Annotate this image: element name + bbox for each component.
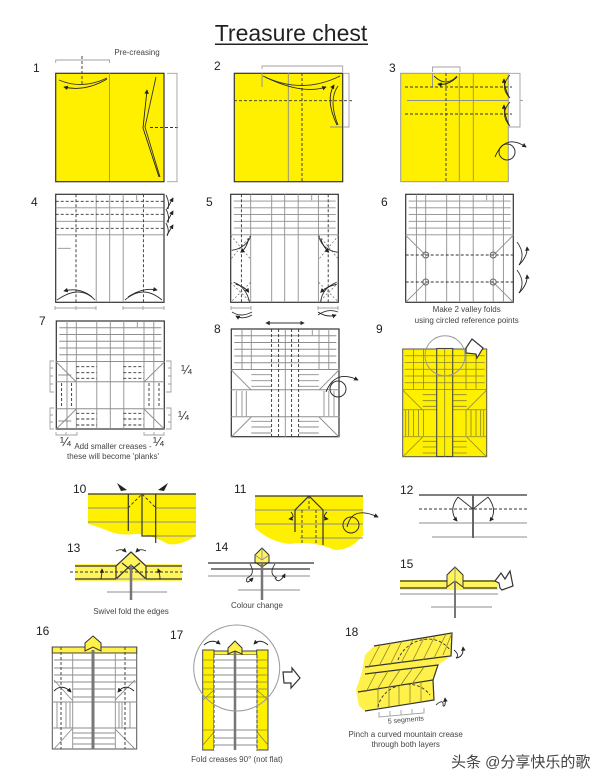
icon: turn over — [495, 142, 526, 160]
step 11: 11 — [234, 482, 247, 496]
step 12 — [400, 483, 527, 538]
step 17 — [170, 625, 300, 764]
step 4: 4 — [31, 195, 38, 209]
step 18: 5 segments — [388, 715, 425, 726]
icon: turn over — [343, 513, 378, 533]
step 6 — [381, 194, 527, 325]
arrow: view direction — [283, 668, 300, 688]
step 13: Swivel fold the edges — [93, 607, 169, 616]
step 7: ¼ — [153, 434, 164, 449]
step 15: 15 — [400, 557, 414, 571]
step 9: 9 — [376, 322, 383, 336]
step 9 — [376, 322, 487, 457]
step 17: Fold creases 90° (not flat) — [191, 755, 283, 764]
step 3: 3 — [389, 61, 396, 75]
step 14: 14 — [215, 540, 229, 554]
step 18: Pinch a curved mountain crease — [349, 730, 463, 739]
icon: turn over — [326, 376, 358, 397]
step 17: 17 — [170, 628, 184, 642]
step 1: pre-creasing: Pre-creasing — [114, 48, 160, 57]
step 1: pre-creasing — [33, 48, 180, 182]
step 8 — [214, 322, 358, 437]
step 2: 2 — [214, 59, 221, 73]
step 6: using circled reference points — [415, 316, 519, 325]
step 6: Make 2 valley folds — [433, 305, 501, 314]
watermark: 头条 @分享快乐的歌 — [451, 754, 590, 771]
step 3 — [389, 61, 526, 182]
step 7 — [39, 314, 192, 461]
step 14 — [208, 540, 314, 610]
step 16: 16 — [36, 624, 50, 638]
step 18: 18 — [345, 625, 359, 639]
step 7: these will become 'planks' — [67, 452, 159, 461]
arrow: view from here — [466, 339, 483, 358]
step 13 — [67, 541, 185, 616]
title: Treasure chest — [215, 20, 368, 46]
step 8: 8 — [214, 322, 221, 336]
step 5 — [206, 194, 339, 318]
arrow: view direction — [495, 571, 513, 590]
step 10: 10 — [73, 482, 87, 496]
step 10 — [73, 482, 196, 544]
step 12: 12 — [400, 483, 414, 497]
step 13: 13 — [67, 541, 81, 555]
step 7: Add smaller creases - — [74, 442, 152, 451]
step 14: Colour change — [231, 601, 284, 610]
step 1: pre-creasing: 1 — [33, 61, 40, 75]
step 15 — [400, 557, 513, 618]
step 7: ¼ — [60, 434, 71, 449]
step 7: ¼ — [178, 408, 189, 423]
step 7: 7 — [39, 314, 46, 328]
step 5: 5 — [206, 195, 213, 209]
step 11 — [234, 482, 378, 550]
step 16 — [36, 624, 137, 749]
step 2 — [214, 59, 352, 182]
step 6: 6 — [381, 195, 388, 209]
step 4 — [31, 194, 173, 310]
step 18 — [345, 625, 463, 749]
step 7: ¼ — [181, 362, 192, 377]
step 18: through both layers — [371, 740, 440, 749]
